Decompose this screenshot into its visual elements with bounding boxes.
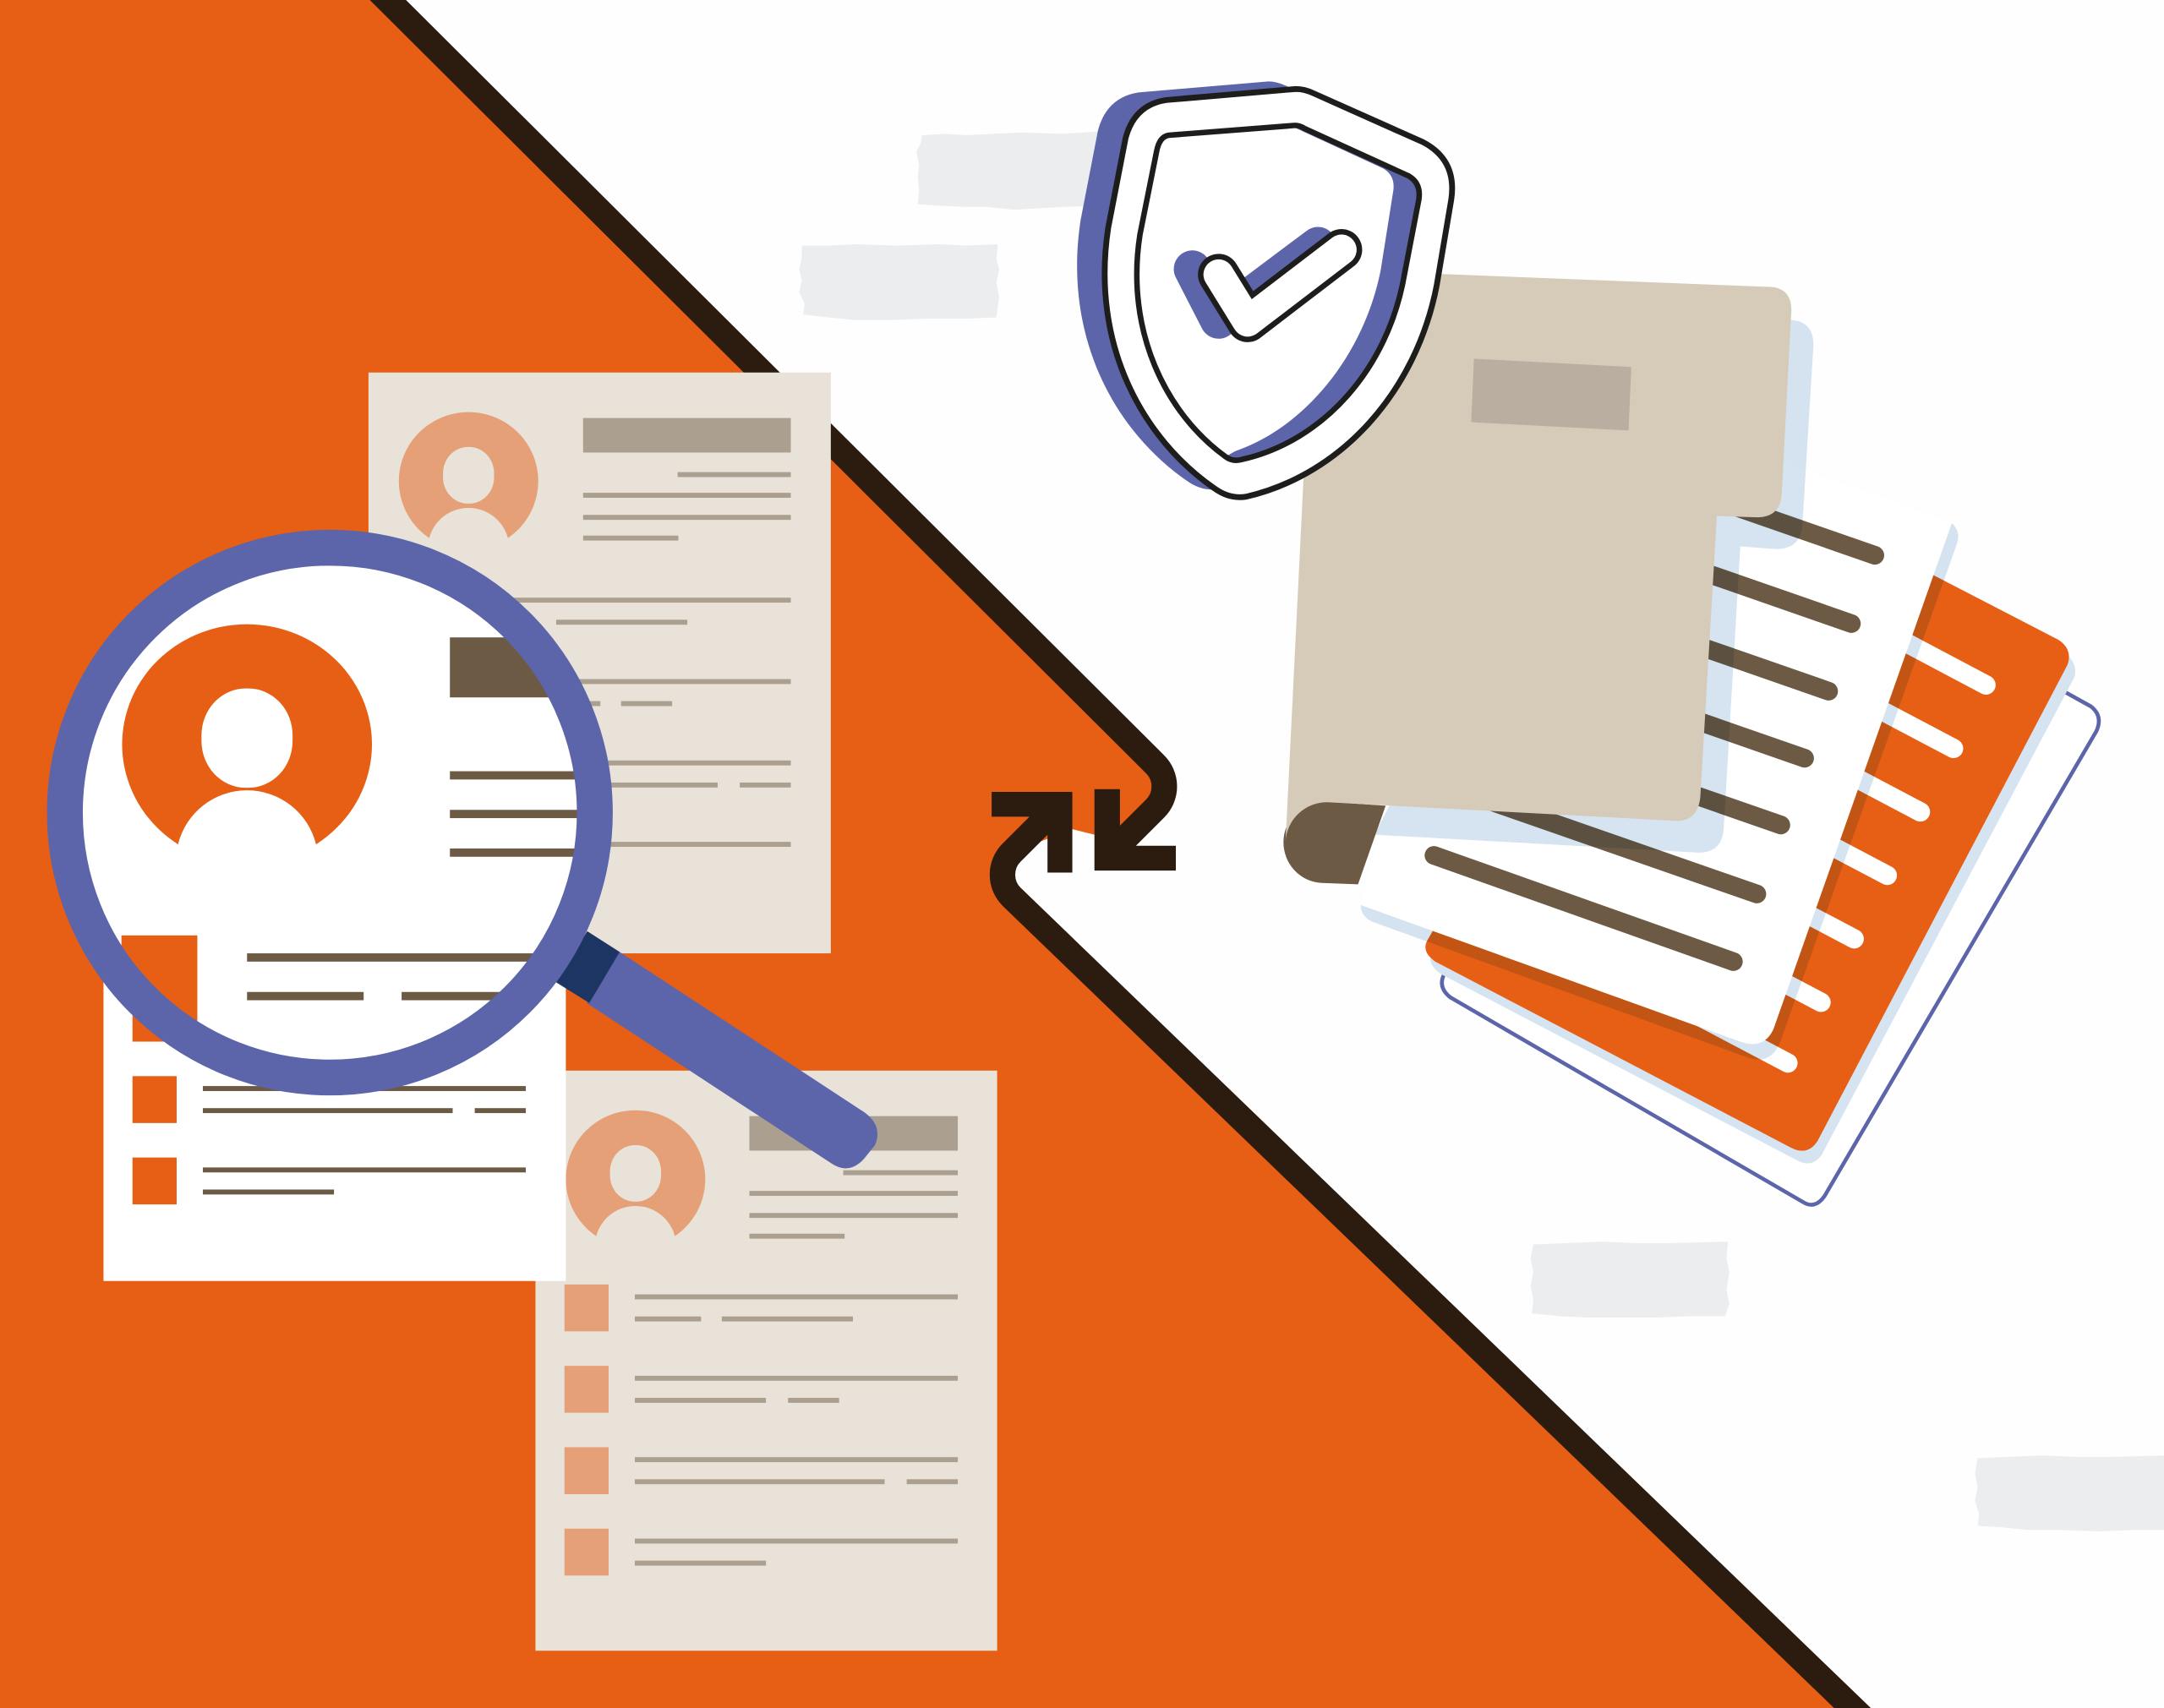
shield inner outline xyxy=(1137,125,1419,461)
shield outer xyxy=(1105,89,1452,497)
row bullets xyxy=(565,1285,609,1575)
avatar xyxy=(399,412,538,538)
white bars xyxy=(1651,613,1986,1063)
white paper xyxy=(1361,384,1952,1044)
magnifier ring xyxy=(65,548,595,1078)
orange sheet shadow xyxy=(1430,469,2075,1164)
magnified bullet xyxy=(122,935,198,1021)
shield inner white xyxy=(1137,127,1394,456)
shield icon xyxy=(1077,81,1452,497)
resume: bottom xyxy=(535,1071,997,1651)
folder body xyxy=(1286,269,1791,842)
orange sheet xyxy=(1425,456,2069,1151)
shield inner fill xyxy=(1137,125,1419,461)
magnified resume lines xyxy=(247,637,588,1001)
folder xyxy=(1283,269,1813,884)
folder shadow xyxy=(1374,320,1813,853)
paper shadow xyxy=(1361,523,1959,1060)
resume lines xyxy=(635,1116,958,1566)
upper diagonal arrow xyxy=(366,0,1176,870)
avatar xyxy=(566,1110,705,1236)
outlined back sheet xyxy=(1442,685,2099,1205)
check mark xyxy=(1219,249,1342,321)
paper text bars xyxy=(1434,449,1875,962)
shield shadow xyxy=(1077,81,1424,489)
resume: top xyxy=(369,373,831,953)
resume lines xyxy=(203,1086,526,1194)
document stack xyxy=(1361,384,2099,1205)
magnifier handle xyxy=(556,931,877,1168)
resume: white middle xyxy=(103,701,566,1281)
folder label xyxy=(1471,358,1631,430)
magnifier lens content xyxy=(83,565,577,1021)
row bullets xyxy=(133,995,177,1204)
lower diagonal arrow xyxy=(992,792,1883,1708)
check mark shadow xyxy=(1193,246,1318,320)
background smudges xyxy=(799,131,2164,1531)
resume lines xyxy=(467,418,791,847)
magnified avatar xyxy=(122,625,372,844)
folder roll xyxy=(1283,801,1385,884)
